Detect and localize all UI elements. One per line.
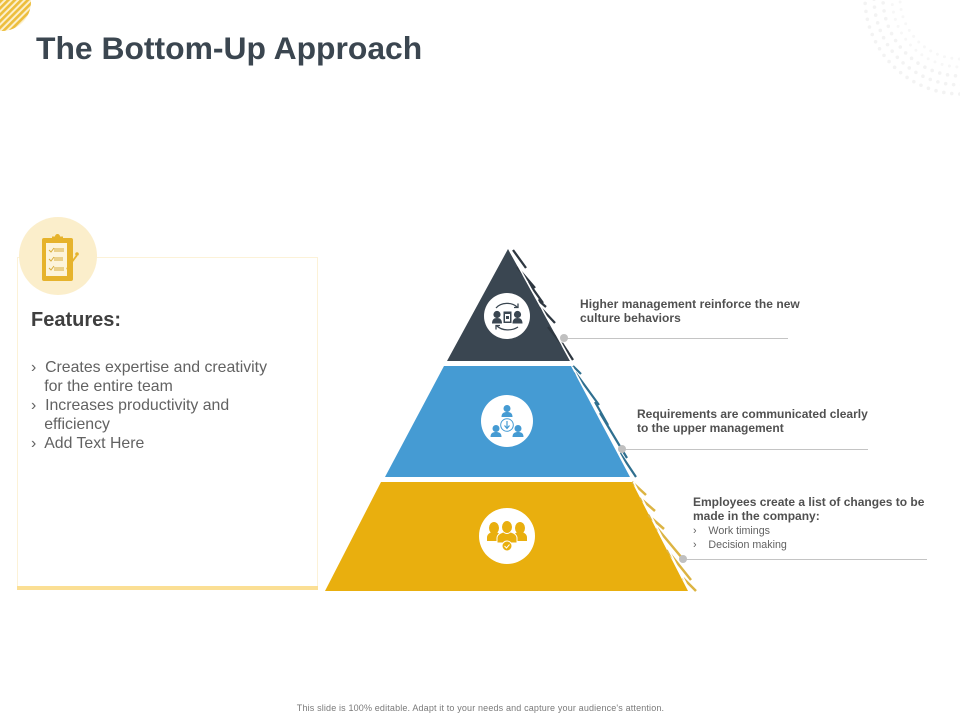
text: middle tier: to the upper management: [637, 421, 784, 435]
text: bottom tier: Employees create a list of changes to be: [693, 495, 924, 509]
text: top tier: Higher management reinforce the new: [580, 297, 800, 311]
features list: › Increases productivity and: [31, 397, 229, 414]
features heading: Features:: [31, 309, 121, 331]
text: middle tier: [637, 407, 868, 435]
pyramid tier: top dark: [447, 249, 573, 361]
footer note: This slide is 100% editable. Adapt it to your needs and capture your audience's attention.: [297, 703, 664, 713]
text: bottom tier: [693, 495, 924, 551]
features list: for the entire team: [44, 378, 173, 395]
bottom tier list: › Decision making: [693, 539, 787, 551]
leader line: middle: [618, 445, 868, 453]
tier stripes: [632, 482, 696, 591]
tier stripes: [573, 366, 636, 477]
title: The Bottom-Up Approach: [36, 30, 422, 66]
icon: management exchange: [484, 293, 530, 339]
features list: › Add Text Here: [31, 435, 144, 452]
features list: › Creates expertise and creativity: [31, 359, 267, 376]
icon: clipboard badge: [19, 217, 97, 295]
tier stripes: [513, 250, 573, 360]
pyramid tier: bottom yellow: [325, 482, 696, 591]
features list: [31, 359, 267, 452]
text: bottom tier: made in the company:: [693, 509, 820, 523]
leader line: top: [560, 334, 788, 342]
decoration: striped circle top left: [0, 0, 31, 31]
pyramid: [325, 249, 697, 592]
text: top tier: culture behaviors: [580, 311, 681, 325]
leader line: bottom: [679, 555, 927, 563]
bottom tier list: › Work timings: [693, 525, 770, 537]
bottom tier list: [693, 525, 787, 551]
text: top tier: [580, 297, 800, 325]
icon: employees: [479, 508, 535, 564]
decoration: dotted arcs top right: [864, 0, 960, 96]
panel: features: [17, 257, 318, 590]
panel outline: [17, 257, 318, 590]
panel bottom bar: [17, 586, 318, 590]
icon: team communication: [481, 395, 533, 447]
pyramid tier: middle blue: [385, 366, 636, 477]
text: middle tier: Requirements are communicated clearly: [637, 407, 868, 421]
features list: efficiency: [44, 416, 110, 433]
